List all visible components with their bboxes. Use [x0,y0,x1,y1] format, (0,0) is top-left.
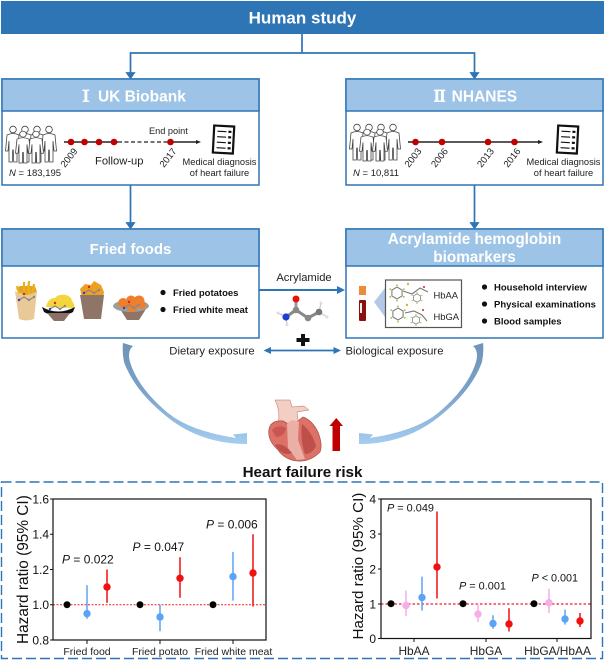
x labels [398,644,591,658]
icon: people group [350,124,400,161]
label: Dietary exposure: Dietary exposure [169,346,255,358]
chart: fried foods hazard ratio [15,492,272,658]
list: assessments: Physical examinations [494,300,596,310]
y ticks: 0 [369,632,376,646]
y ticks: 1.2 [32,563,49,577]
y ticks [369,492,376,646]
arrow: study to cohorts [127,34,478,78]
x labels [63,646,272,658]
y ticks [32,492,49,648]
icon: fries cone [15,281,37,320]
y ticks: 3 [369,528,376,542]
list: fried foods: Fried potatoes [173,288,238,299]
data: intervals red [437,512,580,632]
heading: UK Biobank: Ⅰ UK Biobank [78,84,186,106]
text: sample size: N = 10,811 [353,168,399,179]
icon: callout wedge [374,288,385,317]
panel: Fried foods [2,229,259,338]
timeline: 2016 [502,146,523,170]
timeline: follow-up: Follow-up [95,156,144,168]
reference line [53,604,266,606]
data: intervals red [107,534,253,606]
reference line [381,603,591,605]
y ticks: 4 [369,492,376,506]
P values [387,502,578,592]
timeline [403,139,543,170]
P values [62,518,258,566]
icon: chicken plate [113,296,149,320]
data: intervals blue [87,552,233,631]
heading: NHANES: Ⅱ NHANES [432,84,517,106]
x labels: HbGA [470,644,502,658]
data: points [388,563,584,628]
panel: NHANES: of heart failure [534,168,593,178]
x labels: HbAA [398,644,430,658]
icon: up risk arrow [330,418,343,451]
panel: results dashed box [2,482,602,658]
y-axis title: Hazard ratio (95% CI) [15,495,32,644]
icon: blood tube [359,286,366,321]
x labels: Fried potato [132,646,188,658]
y ticks: 2 [369,562,376,576]
y ticks: 1.4 [32,528,49,542]
P values: P < 0.001 [532,572,578,584]
label: Acrylamide: Acrylamide [276,272,332,284]
heading: Fried foods: Fried foods [90,241,171,258]
y ticks: 1 [369,598,376,612]
y ticks: 1.6 [32,492,49,506]
timeline: 2006 [429,146,451,170]
list: assessments [482,282,596,328]
text: diagnosis: Medical diagnosis [183,157,257,167]
arrow: left curved to heart [123,343,247,444]
timeline: follow-up: End point [149,126,188,136]
arrow: acrylamide link [259,286,345,294]
timeline: follow-up [59,126,201,170]
molecule box [386,280,462,328]
panel: UK Biobank: of heart failure [190,168,249,178]
list: assessments: Household interview [494,282,588,294]
icon: people group [6,126,56,163]
data: intervals blue [422,577,565,629]
y ticks: 1.0 [32,598,49,612]
icon: heart [269,400,321,461]
heading: biomarkers: Acrylamide hemoglobin [388,231,561,248]
timeline: follow-up: 2009 [59,146,80,170]
panel: Acrylamide hemoglobin biomarkers [346,229,603,338]
x labels: HbGA/HbAA [524,644,591,658]
text: sample size: N = 183,195 [9,168,61,179]
heading: biomarkers: biomarkers [433,249,516,266]
P values: P = 0.049 [387,502,434,514]
arrow: cohorts to exposure panels [127,185,478,228]
icon: nuggets box [80,281,104,319]
list: assessments: Blood samples [494,316,562,328]
title bar: Human study [249,8,357,28]
panel: NHANES [346,79,603,185]
data: intervals pink [406,589,549,622]
x labels: Fried white meat [195,646,272,658]
y-axis title: Hazard ratio (95% CI) [350,493,367,640]
timeline: 2003 [403,146,424,170]
icon: checklist [557,126,578,154]
text: diagnosis: Medical diagnosis [527,157,601,167]
P values: P = 0.047 [132,540,185,554]
x labels: Fried food [63,646,111,658]
icon: acrylamide molecule [276,296,328,326]
icon: checklist [213,126,234,154]
timeline: 2013 [475,146,497,170]
title bar [1,1,604,34]
arrow: right curved to heart [359,343,483,444]
data: points [64,569,257,621]
y ticks: 0.8 [32,634,49,648]
chart: biomarkers hazard ratio [350,492,591,658]
molecule box: HbAA [434,290,459,300]
panel: UK Biobank [2,79,259,185]
P values: P = 0.001 [459,580,506,592]
icon: plus [296,334,310,346]
list: fried foods: Fried white meat [173,305,249,316]
icon: chips bowl [42,295,75,321]
timeline: follow-up: 2017 [158,146,179,170]
heading: biomarkers [388,231,561,266]
P values: P = 0.006 [206,518,258,532]
P values: P = 0.022 [62,552,114,566]
arrow: exposure double arrow [264,347,341,354]
heading: Heart failure risk: Heart failure risk [243,464,363,481]
molecule box: HbGA [434,311,460,322]
list: fried foods [160,288,249,316]
label: Biological exposure: Biological exposure [346,346,443,358]
